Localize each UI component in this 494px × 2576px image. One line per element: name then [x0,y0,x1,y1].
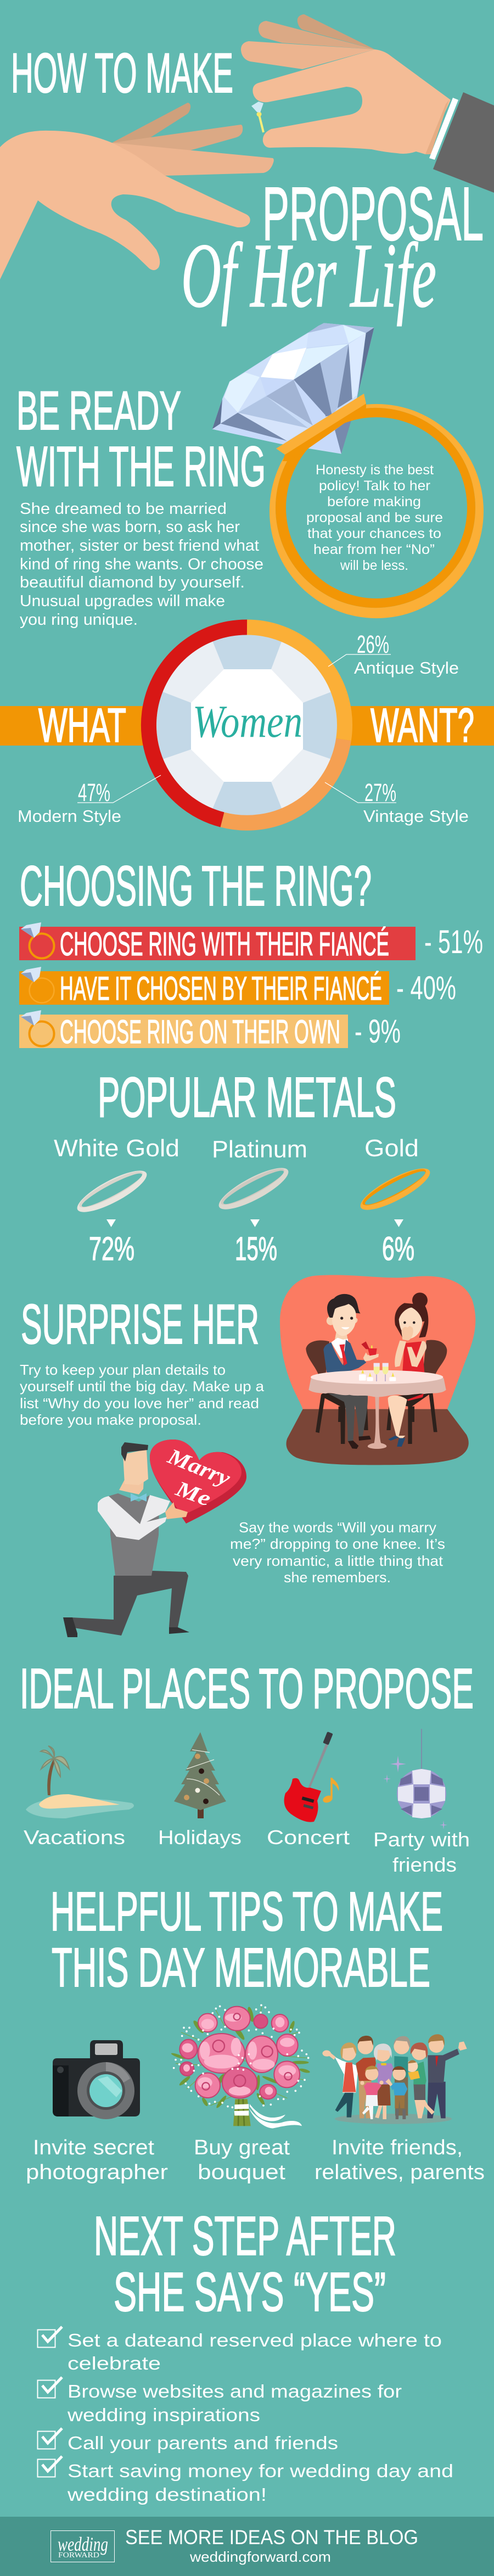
man's hand [252,49,451,154]
grandmother [374,2043,394,2119]
item: browse websites: wedding inspirations [67,2405,260,2425]
place: concert: Concert [267,1826,350,1849]
mum with baby [406,2042,435,2118]
donut chart: ring styles [148,627,346,823]
ribbon bands [234,2104,249,2115]
callout: vintage style: 27% [364,779,396,807]
baby's breath flowers [174,2005,308,2107]
item: set a date [37,2327,442,2373]
shirt cuff [429,98,458,160]
metal: platinum 15%: Platinum [212,1136,307,1163]
woman's fingers [112,103,274,176]
peony light petals [182,2014,296,2096]
tip: secret photographer: Invite secret [33,2136,154,2159]
text block: ask about the ring: you ring unique. [20,611,138,629]
text block: honesty callout inside ring: Honesty is the best [316,462,434,478]
hair [121,1442,148,1461]
leaves [171,2006,310,2109]
text block: say the words: me?” dropping to one knee. It’s [230,1536,445,1552]
girl in pink [360,2066,384,2119]
neck [119,1480,144,1494]
tip: friends and family [315,2034,485,2184]
metal: gold 6%: 6% [382,1230,414,1267]
text block: say the words [230,1519,445,1586]
text block: keep your plan secret: yourself until the big day. Make up a [20,1378,265,1395]
woman's hand [0,131,250,279]
man's upper fingers [241,14,375,69]
item: set a date: Set a dateand reserved place where to [68,2330,442,2350]
peony blossoms [179,2007,300,2099]
tip: secret photographer: photographer [26,2161,168,2184]
tip: friends and family: relatives, parents [315,2161,485,2184]
hand [165,1502,188,1519]
text block: ask about the ring: kind of ring she wants. Or choose [20,556,263,573]
man's sleeve [433,92,494,193]
icon: diamond ring [21,1010,54,1046]
logo: wedding forward: wedding [58,2533,108,2555]
segment: modern 47% [149,627,247,820]
illustration: diamond [212,323,374,454]
text block: keep your plan secret: Try to keep your plan details to [20,1362,226,1378]
bow tie [131,1493,147,1502]
candles and champagne glasses [359,1363,396,1381]
icon: diamond ring [21,967,54,1003]
title: how to make: HOW TO MAKE [11,42,233,104]
icon: christmas tree [174,1732,226,1818]
tip: friends and family: Invite friends, [332,2136,463,2159]
metal: gold 6% [356,1135,435,1267]
tip: great bouquet [171,2005,310,2184]
text block: keep your plan secret: before you make proposal. [20,1412,201,1428]
tip: great bouquet: Buy great [194,2136,290,2159]
father in red shirt [356,2036,376,2118]
text block: honesty callout inside ring [306,462,443,573]
item: set a date: celebrate [68,2353,161,2373]
text block: ask about the ring: She dreamed to be married [20,500,227,518]
bouquet stems [233,2099,251,2126]
heading: next step after she says yes [94,2205,396,2323]
callout: antique style [328,630,459,677]
metal: platinum 15%: 15% [235,1230,277,1267]
metal: gold 6%: Gold [364,1135,419,1162]
text block: honesty callout inside ring: before making [327,494,421,509]
illustration: orange ring frame [270,394,484,618]
heading: be ready with the ring: BE READY [16,380,181,441]
callout: vintage style [325,779,469,826]
callout: modern style [18,775,161,826]
item: start saving [37,2456,453,2505]
boy in blue [385,2067,407,2119]
callout: antique style: Antique Style [354,658,459,677]
wrist shadow [425,100,449,154]
place: concert [267,1732,350,1849]
segment: vintage 27% [222,740,344,823]
text block: say the words: she remembers. [284,1569,391,1586]
man proposing [323,1294,379,1449]
heading: helpful tips to make this day memorable [50,1881,443,1998]
segment: antique 26% [247,627,345,740]
text block: keep your plan secret: list “Why do you love her” and read [20,1395,259,1412]
item: browse websites: Browse websites and magazines for [68,2381,402,2401]
checklist [37,2327,453,2505]
table [308,1370,446,1449]
place: party with friends: Party with [373,1828,470,1851]
right chair [386,1340,447,1444]
banner word: what: WHAT [38,699,126,752]
icon: diamond ring [21,922,54,959]
left chair [306,1340,368,1444]
ribbon tails [249,2104,302,2129]
baby's breath stems [176,2007,307,2105]
item: browse websites [37,2377,402,2425]
shirt and arm [98,1495,170,1540]
icon: peony bouquet [171,2005,310,2129]
bar: choose ring on their own 9%: - 9% [355,1013,401,1050]
shoes [63,1617,189,1637]
heart: Marry [164,1443,234,1491]
text block: ask about the ring: since she was born, so ask her [20,518,240,536]
metal: white gold 72%: White Gold [54,1135,179,1162]
icon: platinum band [214,1161,293,1217]
icon: camera [53,2040,140,2119]
callout: antique style: 26% [357,630,389,658]
woman surprised [388,1292,428,1447]
illustration: couple at restaurant table [280,1275,475,1465]
tip: great bouquet: bouquet [198,2161,285,2184]
text block: ask about the ring: mother, sister or best friend what [20,537,259,555]
coral backdrop [280,1275,475,1409]
bar: choose ring on their own 9% [19,1010,401,1050]
text block: honesty callout inside ring: policy! Talk to her [319,478,430,494]
text block: honesty callout inside ring: hear from her “No” [313,542,435,557]
text block: honesty callout inside ring: proposal and be sure [306,510,443,525]
icon: electric guitar and note [284,1732,339,1822]
grandpa [394,2036,410,2115]
item: start saving: Start saving money for wedding day and [68,2461,453,2481]
face [123,1449,148,1485]
orange banner [0,706,494,746]
metal: white gold 72% [54,1135,179,1267]
text block: honesty callout inside ring: that your chances to [307,526,441,541]
callout: modern style: Modern Style [18,807,121,826]
callout: vintage style: Vintage Style [363,807,469,826]
icon: white gold band [72,1163,151,1219]
trousers [71,1571,188,1636]
place: vacations: Vacations [24,1826,125,1849]
text block: ask about the ring: Unusual upgrades will make [20,592,225,610]
heading: surprise her: SURPRISE HER [21,1293,259,1356]
bar: have it chosen by their fiance 40%: - 40% [396,970,456,1006]
text block: ask about the ring: beautiful diamond by yourself. [20,574,245,591]
heading: be ready with the ring: WITH THE RING [16,435,266,498]
diamond facets [156,635,337,815]
heart: Me [172,1476,214,1511]
metal: white gold 72%: 72% [89,1230,134,1267]
chart centre word: Women [193,696,302,747]
mother in apron [322,2042,358,2118]
heart [150,1440,246,1524]
illustration: family group [322,2034,467,2124]
logo: wedding forward [50,2531,114,2562]
text block: honesty callout inside ring: will be less. [340,558,408,573]
brown floor [286,1409,469,1465]
text block: keep your plan secret [20,1362,265,1428]
waistcoat [109,1493,159,1576]
footer bar [0,2517,494,2576]
heading: be ready with the ring [16,380,266,498]
logo: wedding forward: FORWARD [58,2551,99,2560]
place: holidays: Holidays [158,1826,242,1849]
ring held in fingers [251,102,263,132]
place: party with friends: friends [392,1853,457,1876]
peony hearts [202,2013,292,2090]
illustration: hands exchanging ring [0,14,494,279]
place: holidays [158,1732,242,1849]
tip: secret photographer [26,2040,168,2184]
text block: say the words: very romantic, a little thing that [233,1553,444,1569]
callout: modern style: 47% [78,779,110,807]
website address: weddingforward.com [189,2549,331,2565]
item: call parents: Call your parents and friends [68,2433,338,2453]
place: party with friends [373,1729,470,1876]
metal: platinum 15% [212,1136,307,1267]
item: start saving: wedding destination! [67,2484,267,2505]
dad in suit [427,2034,467,2118]
icon: palm island [26,1746,134,1818]
call to action: SEE MORE IDEAS ON THE BLOG [125,2526,418,2549]
text block: ask about the ring [20,500,263,629]
ground shadow [335,2114,452,2124]
icon: gold band [356,1161,435,1217]
place: vacations [24,1746,134,1849]
text block: say the words: Say the words “Will you marry [239,1519,436,1536]
icon: disco ball [383,1729,447,1829]
illustration: kneeling man with heart [63,1440,246,1637]
item: call parents [37,2428,338,2453]
